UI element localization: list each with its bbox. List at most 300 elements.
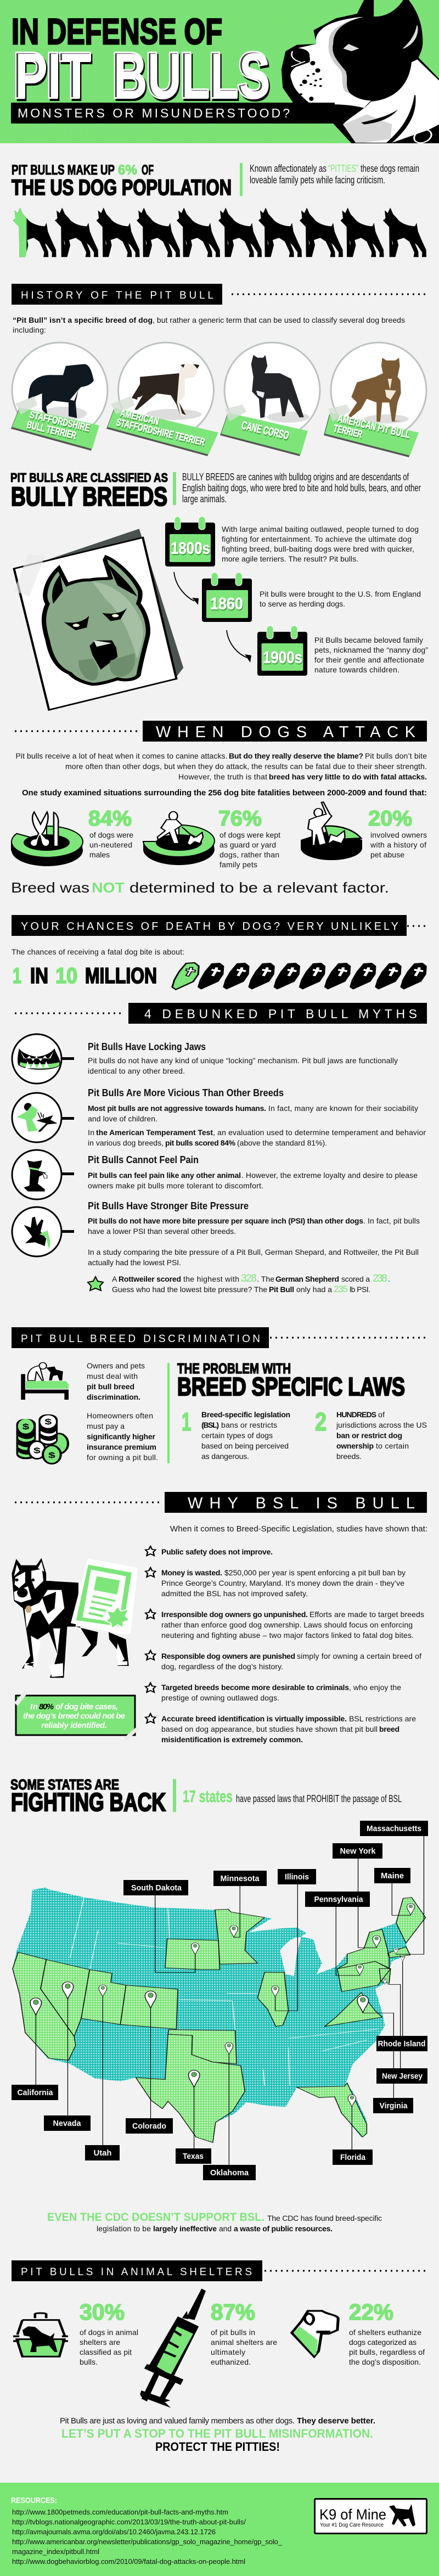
text: resource links: http://www.1800petmeds.com/education/pit-bull-facts-and-myths.htm [12,2508,228,2516]
text: 1800s: more agile terriers. The result? Pit bulls. [222,554,358,563]
section heading: breed discrimination: PIT BULL BREED DISCRIMINATION [21,1333,260,1345]
stat: 20% pet abuse: involved owners [370,830,427,839]
label: new york: New York [340,1847,376,1856]
label: south dakota: South Dakota [131,1883,182,1893]
point 2 [315,1407,427,1461]
callout: cdc does not support bsl: EVEN THE CDC DOESN’T SUPPORT BSL. [47,2211,264,2224]
label: nevada: Nevada [53,2119,81,2128]
text: owners and pets: discrimination. [87,1393,140,1401]
text: attacks paragraph: more often than other dogs, but when they do attack, the results can be fatal due to their sheer strength. [65,762,427,771]
breed: american pit bull terrier: TERRIER [333,423,363,441]
stat: 1 in 10 million: IN [30,964,48,988]
label: texas [176,2148,211,2164]
myth 1: locking jaws: Pit bulls do not have any kind of unique “locking” mechanism. Pit bull jaws are functionally [88,1056,398,1065]
myth 4: bite pressure: In a study comparing the bite pressure of a Pit Bull, German Shepard, and Rottweiler, the Pit Bull [88,1248,419,1256]
icon: donut with person walking dog [143,812,215,865]
closing message: Pit Bulls are just as loving and valued family members as other dogs. [60,2416,295,2426]
calendar: 1800s: 1800s [171,540,211,559]
breed: cane corso: CANE CORSO [240,419,290,442]
label: rhode island: Rhode Island [378,2039,426,2049]
stat: 20% pet abuse: with a history of [370,840,426,849]
point 1: as dangerous. [201,1452,249,1461]
label: maine [374,1868,410,1883]
callout: bite pressure scores: 328 [241,1273,257,1284]
calendar: 1800s: 1800s [171,538,210,558]
breed: staffordshire bull terrier [11,343,108,451]
calendar: 1800s [165,517,215,566]
text: resource links: http://tvblogs.nationalgeographic.com/2013/03/19/the-truth-about-pit-bulls/ [12,2518,246,2526]
text: attacks paragraph: breed has very little to do with fatal attacks. [269,772,427,781]
title line: pit bulls: PIT [15,42,92,113]
arrow: 1800s to 1860 [174,572,199,605]
illustration: dog with certificate [12,1558,137,1678]
panel: myths [12,1034,426,1294]
myth 3: cannot feel pain: owners make pit bulls more tolerant to discomfort. [88,1181,263,1190]
closing message: PROTECT THE PITTIES! [155,2440,280,2454]
point 2: 2 [315,1407,327,1436]
reason: breed identification: Accurate breed identification is virtually impossible. [161,1714,347,1723]
title line: pit bulls: PIT [15,40,92,111]
heading: make up 6%: OF [142,162,154,178]
stat: 1 in 10 million: MILLION [85,964,157,988]
icon: person and dog [12,1093,74,1142]
text: homeowners: must pay a [87,1422,125,1430]
icon: syringe [140,2288,206,2408]
stat: 30% of shelter dogs: shelters are [80,2338,120,2347]
icon: coins: $ [33,1446,41,1455]
icon: coins: $ [44,1417,52,1427]
stat: 87% euthanized: animal shelters are [211,2338,277,2347]
icon: coins [16,1415,68,1464]
stat: 84% un-neutered [11,807,133,866]
calendar: 1860: 1860 [210,594,243,613]
subtitle bar: MONSTERS OR MISUNDERSTOOD? [18,106,290,120]
icon: green star [88,1277,103,1290]
reason: breed identification [145,1714,416,1744]
text: pitties intro: Known affectionately as [250,163,327,174]
point 2: to certain [376,1441,409,1450]
stat: 22% of shelters: the dog’s disposition. [349,2358,421,2366]
callout: bite pressure scores: only had a [296,1285,332,1294]
illustration: pit bull head [282,0,439,145]
label: florida: Florida [340,2153,366,2162]
callout: cdc does not support bsl: The CDC has found breed-specific [267,2214,382,2223]
heading: make up 6%: 6% [118,162,137,178]
text: attacks paragraph: But do they really deserve the blame? [229,751,363,760]
stat: 84% un-neutered: males [89,850,110,859]
section heading: debunked myths [15,1003,427,1024]
text: 1860: Pit bulls were brought to the U.S. from England [260,590,421,598]
text: resource links: magazine_index/pitbull.html [12,2547,99,2556]
text: resource links: http://avmajournals.avma.org/doi/abs/10.2460/javma.243.12.1726 [12,2528,216,2536]
subtitle bar [11,103,335,124]
breed: cane corso [220,343,320,456]
text: 1900s: pets, nicknamed the “nanny dog” [314,646,428,654]
section heading: chances of death [12,915,426,936]
reason: breed identification: BSL restrictions are [349,1714,416,1723]
text: owners and pets: pit bull breed [87,1382,134,1391]
logo: k9 of mine: K9 of Mine [319,2506,386,2523]
icon: bitten hand [12,1207,74,1256]
reason: responsible owners: simply for owning a certain breed of [297,1652,421,1660]
myth 2: more vicious: In fact, many are known for their sociability [268,1104,418,1113]
callout: bite pressure scores: A [112,1275,117,1283]
map callout lines [36,1836,424,2165]
section heading: history: HISTORY OF THE PIT BULL [21,290,213,301]
section heading: why bsl is bull [15,1492,427,1513]
stat: 87% euthanized: of pit bulls in [211,2328,255,2337]
icon: dog head with bandana [292,2311,338,2356]
logo: k9 of mine: Your #1 Dog Care Resource [320,2522,384,2528]
reason: money wasted: Money is wasted. [161,1568,222,1577]
myth 4: bite pressure: actually had the lowest PSI. [88,1258,181,1267]
reason: breed identification: based on dog appearance, but studies have shown that pit bull [161,1725,378,1733]
section heading: debunked myths: 4 DEBUNKED PIT BULL MYTHS [144,1007,417,1021]
panel: history timeline [165,517,428,676]
text: bsl studies intro: When it comes to Breed-Specific Legislation, studies have shown that: [170,1524,427,1534]
text: pitties intro: “PITTIES” [328,163,358,174]
panel: fighting back heading [10,1776,402,1816]
reason: breed identification: breed [379,1725,399,1733]
callout: bite pressure scores: German Shepherd [275,1275,339,1283]
callout: 80% of bite cases: the dog’s breed could not be [23,1711,125,1721]
label: virginia: Virginia [380,2101,408,2111]
panel: fighting back heading: FIGHTING BACK [11,1788,166,1816]
icon: coins: $ [22,1422,30,1432]
icon: dog with bandaged paw [12,1150,74,1199]
map pins [30,1904,414,2107]
reason: targeted breeds: Targeted breeds become more desirable to criminals [161,1683,349,1692]
text: owners and pets: must deal with [87,1372,138,1380]
text: 1860 [260,590,421,608]
stat: 20% pet abuse [301,802,427,860]
closing message [60,2416,375,2454]
stat: 1 in 10 million [13,964,157,988]
callout: cdc does not support bsl: legislation to be [97,2224,151,2233]
text: attacks paragraph: However, the truth is that [178,772,267,781]
label: colorado [126,2118,173,2134]
stat: 22% of shelters [292,2299,425,2366]
section heading: history [12,284,426,305]
icon: jaws [12,1034,74,1084]
panel: problem with breed specific laws: THE PROBLEM WITH [177,1360,291,1377]
stat: 22% of shelters: pit bulls, regardless of [349,2348,425,2356]
calendar: 1860 [202,573,252,622]
title line: pit bulls: BULLS [112,40,269,111]
stat: 87% euthanized: ultimately [211,2348,245,2356]
reason: money wasted: Prince George’s Country, Maryland. It’s money down the drain - they’ve [161,1579,404,1587]
myth 1: locking jaws: identical to any other breed. [88,1067,185,1075]
panel: attack statistics [11,802,427,869]
reason: breed identification: misidentification is extremely common. [161,1735,303,1744]
breed: american staffordshire terrier: STAFFORDSHIRE TERRIER [115,418,206,450]
myth 1: locking jaws [12,1034,398,1084]
panel: footer resources [0,2483,439,2576]
label: utah [85,2145,120,2160]
text: 1900s: Pit Bulls became beloved family [314,636,423,644]
label: new jersey [376,2068,427,2084]
section heading: when dogs attack: WHEN DOGS ATTACK [156,723,416,741]
myth 2: more vicious [12,1087,426,1147]
arrow: 1860 to 1900s [227,630,251,663]
text: 1860: to serve as herding dogs. [260,599,345,608]
callout: cdc does not support bsl: a waste of public resources. [234,2224,333,2233]
point 2: ban or restrict dog [336,1431,402,1440]
text: resource links [12,2508,283,2566]
icon: wedge with person and dog [301,802,362,860]
breed: cane corso: CANE CORSO [240,420,290,444]
calendar: 1900s: 1900s [263,648,302,667]
reason: irresponsible owners: Irresponsible dog owners go unpunished. [161,1610,308,1619]
panel: bully breeds heading: BULLY BREEDS [11,482,167,512]
breed: american staffordshire terrier [106,343,218,456]
label: oklahoma [203,2165,256,2180]
callout: 80% of bite cases: In [30,1702,38,1711]
point 1 [182,1407,290,1461]
label: nevada [44,2115,91,2131]
section heading: why bsl is bull: WHY BSL IS BULL [188,1495,415,1512]
panel: shelter statistics [13,2288,425,2408]
text: attacks paragraph: One study examined situations surrounding the 256 dog bite fatalities between 2000-2009 and found that: [22,788,427,798]
stat: 20% pet abuse: pet abuse [370,850,404,859]
label: rhode island [376,2036,427,2051]
reason: responsible owners: Responsible dog owners are punished [161,1652,295,1660]
label: virginia [373,2098,413,2113]
myth 2: more vicious: (above the standard 81%). [237,1138,327,1147]
closing message: LET’S PUT A STOP TO THE PIT BULL MISINFORMATION. [61,2427,373,2440]
point 1: based on being perceived [201,1441,289,1450]
text: 1900s: for their gentle and affectionate [314,655,424,664]
text: pit bull definition: “Pit Bull” isn’t a specific breed of dog [13,316,153,324]
reason: irresponsible owners: rather than enforce good dog ownership. Laws should focus on enforcing [161,1620,413,1629]
stat: 30% of shelter dogs: classified as pit [80,2348,132,2356]
stat: 1 in 10 million: 1 [13,964,21,988]
reason: irresponsible owners: Efforts are made to target breeds [309,1610,424,1619]
text: homeowners: significantly higher [87,1432,156,1441]
breed: staffordshire bull terrier: BULL TERRIER [26,420,78,443]
point 2: ownership [336,1441,374,1450]
chart: ten dog silhouettes, 6% highlighted [13,207,426,257]
myth 4: bite pressure: Pit bulls do not have more bite pressure per square inch (PSI) than other dogs [88,1216,363,1225]
label: new york [333,1843,382,1859]
icon: crate with dog [13,2313,68,2356]
callout: bite pressure scores: lb PSI. [350,1285,370,1294]
chart: ten coffins, one highlighted [172,963,427,990]
myth 3: cannot feel pain: . However, the extreme loyalty and desire to please [241,1171,418,1180]
myth 4: bite pressure: . In fact, pit bulls [363,1216,420,1225]
label: illinois [278,1869,316,1884]
panel: discrimination effects [16,1361,170,1464]
text: resource links: http://www.dogbehaviorblog.com/2010/09/fatal-dog-attacks-on-people.html [12,2557,245,2566]
myth 2: more vicious: the American Temperament Test [96,1128,213,1137]
stat: 76% guard dogs: family pets [219,860,257,869]
reason: money wasted: admitted the BSL has not improved safety. [161,1589,308,1598]
text: bully breed definition: large animals. [182,493,227,504]
text: 1900s [314,636,428,674]
callout: cdc does not support bsl [47,2211,382,2233]
calendar: 1900s [257,626,307,676]
reason: irresponsible owners [145,1609,424,1640]
point 1: bans or restricts [221,1421,277,1429]
reason: targeted breeds: prestige of owning outlawed dogs. [161,1693,279,1702]
calendar: 1860: 1860 [211,595,244,614]
point 2: breeds. [336,1452,362,1461]
text: attacks paragraph [15,751,427,798]
callout: breed not relevant: Breed was [11,879,89,896]
label: minnesota: Minnesota [221,1874,260,1883]
callout: 80% of bite cases: of dog bite cases, [55,1702,118,1711]
myth 3: cannot feel pain: Pit Bulls Cannot Feel Pain [88,1154,199,1165]
label: oklahoma: Oklahoma [210,2168,249,2177]
myth 1: locking jaws: Pit Bulls Have Locking Jaws [88,1041,206,1052]
panel: breed cards [11,343,426,457]
callout: bite pressure scores [88,1273,390,1294]
panel: population heading [12,162,419,200]
breed: american staffordshire terrier: STAFFORDSHIRE TERRIER [115,417,206,448]
stat: 22% of shelters: of shelters euthanize [349,2328,421,2337]
myth 3: cannot feel pain [12,1150,418,1199]
stat: 30% of shelter dogs: 30% [80,2299,125,2325]
stat: 20% pet abuse: 20% [368,807,412,830]
title line: pit bulls: PIT [13,40,90,111]
callout: bite pressure scores: scored a [341,1275,370,1283]
callout: bite pressure scores: . [388,1275,390,1283]
callout: bite pressure scores: the highest with [183,1275,239,1283]
label: florida [333,2150,373,2165]
point 1: certain types of dogs [201,1431,273,1440]
myth 2: more vicious: , an evaluation used to determine temperament and behavior [213,1128,426,1137]
stat: 76% guard dogs [143,807,280,869]
breed: american pit bull terrier: TERRIER [333,424,364,442]
map: united states with BSL-prohibiting states highlighted [13,1836,426,2165]
text: owners and pets: Owners and pets [87,1361,145,1370]
text: attacks paragraph: Pit bulls don’t bite [365,751,427,760]
calendar: 1900s: 1900s [263,649,303,668]
text: 1800s: With large animal baiting outlawed, people turned to dog [222,525,419,534]
stat: 84% un-neutered: of dogs were [89,830,133,839]
stat: 84% un-neutered: 84% [88,807,132,830]
panel: bully breeds heading [10,470,421,512]
icon: coins: $ [48,1451,55,1460]
label: colorado: Colorado [132,2122,166,2131]
panel: fighting back heading: SOME STATES ARE [10,1776,119,1793]
title line: in defense of: IN DEFENSE OF [12,11,222,52]
text: 1800s [222,525,419,563]
stat: 1 in 10 million: 10 [55,964,77,988]
panel: bully breeds heading: PIT BULLS ARE CLASSIFIED AS [10,470,168,485]
title line: pit bulls [13,40,271,113]
label: pennsylvania [305,1892,370,1907]
label: massachusetts: Massachusetts [367,1824,421,1833]
breed: american pit bull terrier [324,343,426,457]
point 1: 1 [182,1407,191,1436]
text: 1800s: fighting for entertainment. To achieve the ultimate dog [222,535,412,543]
reason: targeted breeds [145,1683,401,1702]
reason: responsible owners [145,1651,421,1671]
stat: 30% of shelter dogs: bulls. [80,2358,98,2366]
callout: bite pressure scores: Guess who had the lowest bite pressure? The [112,1285,267,1294]
closing message: They deserve better. [297,2416,375,2426]
stat: 84% un-neutered: un-neutered [89,840,132,849]
stat: 76% guard dogs: as guard or yard [219,840,276,849]
myth 3: cannot feel pain: Pit bulls can feel pain like any other animal [88,1171,241,1180]
text: fatal bite chances: The chances of receiving a fatal dog bite is about: [12,947,184,956]
callout: bite pressure scores: Pit Bull [269,1285,294,1294]
callout: cdc does not support bsl: and [219,2224,232,2233]
stat: 22% of shelters: dogs categorized as [349,2338,417,2347]
text: owners and pets [87,1361,145,1401]
icon: dog silhouette [389,2504,415,2527]
label: california [12,2085,58,2100]
title line: pit bulls: PIT [13,40,90,111]
callout: bite pressure scores: 235 [334,1284,348,1294]
breed: american staffordshire terrier: AMERICAN [119,407,160,428]
title line: pit bulls: BULLS [114,40,271,111]
section heading: chances of death: YOUR CHANCES OF DEATH BY DOG? VERY UNLIKELY [21,921,398,933]
text: attacks paragraph: Pit bulls receive a lot of heat when it comes to canine attacks. [15,751,227,760]
label: maine: Maine [381,1871,404,1881]
text: bully breed definition [182,472,421,504]
callout: breed not relevant: determined to be a relevant factor. [130,879,389,896]
callout: cdc does not support bsl: largely ineffective [153,2224,217,2233]
section heading: breed discrimination [12,1327,426,1348]
text: resource links: http://www.americanbar.org/newsletter/publications/gp_solo_magazine_home/gp_solo_ [12,2538,283,2546]
label: south dakota [123,1880,188,1895]
text: homeowners: for owning a pit bull. [87,1453,158,1462]
point 2: of [378,1410,385,1419]
myth 4: bite pressure [12,1200,420,1267]
text: pitties intro [250,163,419,186]
reason: public safety: Public safety does not improve. [161,1547,273,1556]
icon: donut with scissors [11,812,83,866]
reason: money wasted: $250,000 per year is spent enforcing a pit bull ban by [224,1568,406,1577]
label: utah: Utah [93,2148,112,2158]
breed: american staffordshire terrier: AMERICAN [119,409,160,429]
label: massachusetts [360,1821,428,1836]
myth 2: more vicious: pit bulls scored 84% [165,1138,236,1147]
breed: staffordshire bull terrier: STAFFORDSHIRE [29,409,91,434]
stat: 22% of shelters: 22% [349,2299,393,2325]
text: pitties intro: loveable family pets while facing criticism. [250,175,385,186]
stat: 76% guard dogs: dogs, rather than [219,850,279,859]
label: minnesota [213,1871,267,1886]
stat: 30% of shelter dogs [13,2299,138,2366]
callout: breed not relevant: NOT [92,879,125,896]
title line: pit bulls: BULLS [114,42,271,113]
breed: staffordshire bull terrier: STAFFORDSHIRE [29,411,91,435]
section heading: when dogs attack [15,721,427,742]
point 2: HUNDREDS [336,1410,376,1419]
map state labels [12,1821,428,2180]
myth 2: more vicious: Pit Bulls Are More Vicious Than Other Breeds [88,1087,284,1098]
callout: bite pressure scores: Rottweiler scored [119,1275,181,1283]
myth 4: bite pressure: Pit Bulls Have Stronger Bite Pressure [88,1200,249,1211]
callout: bite pressure scores: . The [257,1275,274,1283]
text: homeowners [87,1411,158,1462]
section heading: animal shelters [12,2260,426,2281]
label: texas: Texas [183,2152,204,2161]
myth 2: more vicious: In [88,1128,94,1137]
text: pit bull definition [13,316,405,334]
stat: 87% euthanized: euthanized. [211,2358,251,2366]
reason: irresponsible owners: neutering and fighting abuse – two major factors linked to fatal dog bites. [161,1631,414,1640]
breed: staffordshire bull terrier: BULL TERRIER [26,419,77,442]
illustration: taped poster with pit bull face [14,529,183,710]
heading: the us dog population: THE US DOG POPULATION [12,176,232,200]
panel: problem with breed specific laws [177,1360,427,1461]
text: pit bull definition: including: [13,325,46,334]
icon: person and dog on bed [21,1362,69,1400]
